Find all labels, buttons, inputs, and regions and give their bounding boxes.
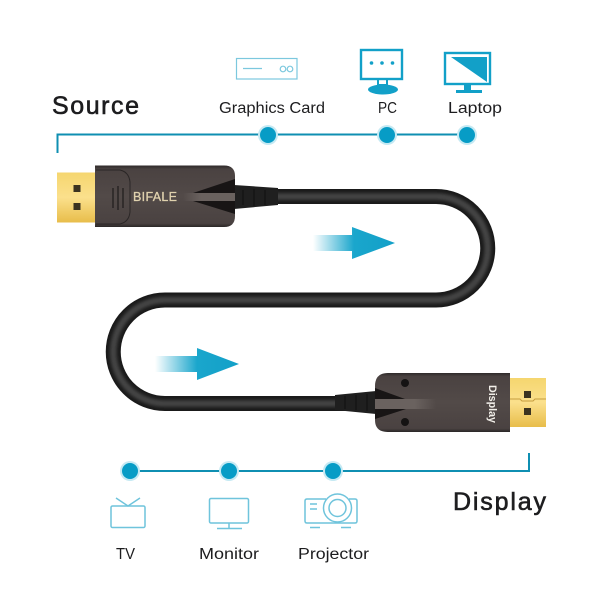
gold contact: [509, 378, 546, 427]
cable: [113, 196, 488, 404]
icon: projector: [305, 494, 357, 528]
icon: PC: [361, 50, 402, 94]
connector: source plug: [57, 166, 235, 227]
label: Projector: Projector: [298, 546, 369, 563]
arrow: lower direction: [155, 348, 239, 380]
housing: [95, 166, 235, 227]
label: Monitor: Monitor: [199, 546, 259, 563]
icon: monitor: [210, 498, 248, 528]
gold contact: [57, 172, 96, 222]
heading: Source: Source: [52, 92, 139, 120]
label: Laptop: Laptop: [448, 100, 502, 117]
label: Graphics Card: Graphics Card: [219, 100, 325, 117]
strain relief: source: [234, 185, 278, 209]
brand: BIFALE: BIFALE: [133, 190, 177, 204]
display timeline: [120, 453, 529, 481]
icon: graphics card: [236, 58, 297, 79]
connector: display plug: [375, 373, 546, 432]
label: TV: TV: [116, 546, 136, 563]
heading: Display: Display: [453, 488, 546, 516]
icon: laptop: [445, 53, 490, 93]
housing: [375, 373, 510, 432]
label: Display on plug: Display: [486, 385, 498, 424]
icon: TV: [111, 498, 145, 528]
source timeline: [58, 125, 477, 153]
label: PC: PC: [378, 100, 397, 117]
arrow: upper direction: [313, 227, 395, 259]
strain relief: display: [335, 391, 376, 414]
